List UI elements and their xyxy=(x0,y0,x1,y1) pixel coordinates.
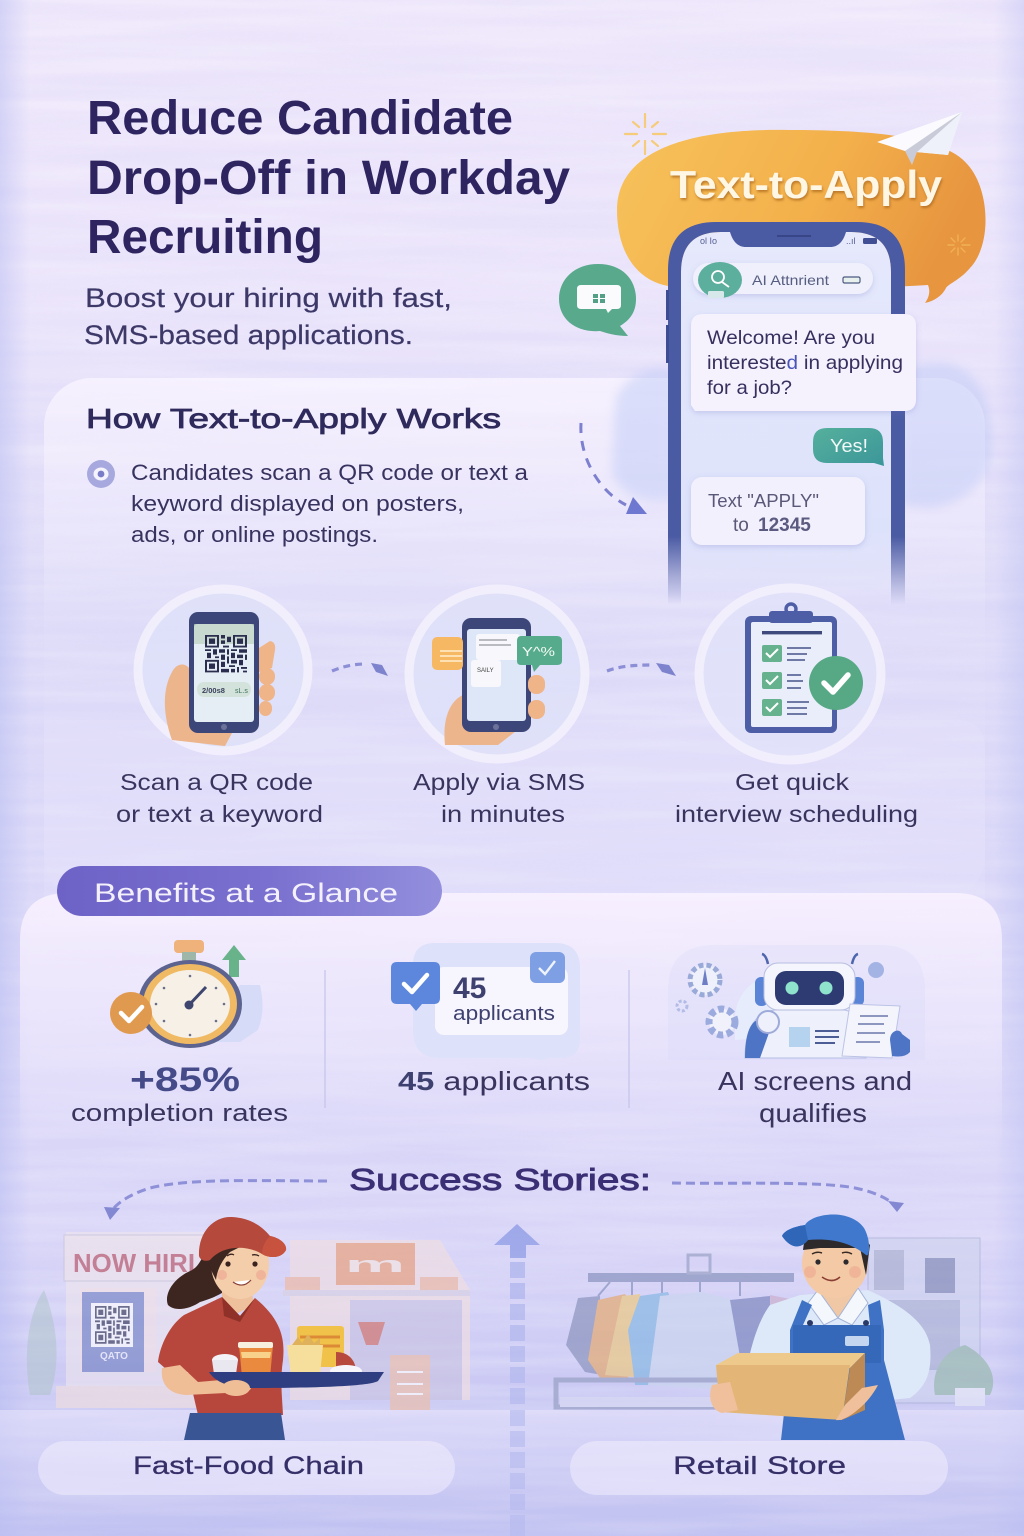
shelves right xyxy=(868,1238,980,1403)
icon: small sparkle on bubble xyxy=(948,235,970,255)
pill label: retail store xyxy=(570,1441,948,1495)
store right xyxy=(290,1240,470,1400)
benefit stat: AI screening: qualifies xyxy=(759,1098,867,1128)
checklist xyxy=(762,645,811,716)
big check xyxy=(809,656,863,710)
welcome message bubble: interested in applying xyxy=(707,352,903,374)
QR code xyxy=(205,635,247,672)
hands xyxy=(710,1382,738,1413)
subtitle: SMS-based applications. xyxy=(84,320,413,350)
QR poster xyxy=(91,1303,133,1347)
neck xyxy=(222,1280,254,1316)
panel: benefits xyxy=(20,893,1002,1155)
dashed arrow right xyxy=(672,1183,904,1212)
hand behind xyxy=(165,665,232,746)
hand xyxy=(444,695,520,745)
bubble heading: Text-to-Apply xyxy=(670,164,942,207)
dashed arrow to phone xyxy=(581,423,647,514)
hangers xyxy=(598,1282,740,1296)
phone mockup xyxy=(666,222,916,605)
shirt xyxy=(158,1297,283,1415)
reply bubble: Yes: Yes! xyxy=(830,436,868,456)
scene: retail store xyxy=(556,1238,993,1407)
lower step band xyxy=(44,720,985,900)
pill label: fast-food chain: Fast-Food Chain xyxy=(133,1452,364,1480)
hair xyxy=(167,1250,232,1309)
benefit dividers xyxy=(325,970,629,1108)
step 2: apply via SMS: SAILY xyxy=(477,668,494,674)
step circle xyxy=(699,588,881,760)
title xyxy=(87,92,570,264)
description text: Candidates scan a QR code or text a xyxy=(131,460,529,485)
face xyxy=(802,1228,868,1298)
arrow: step 1 to 2 xyxy=(332,663,388,676)
phone xyxy=(189,612,259,733)
arrow: step 2 to 3 xyxy=(607,663,676,676)
benefit: stopwatch xyxy=(110,940,263,1048)
welcome message bubble xyxy=(691,314,916,411)
subtitle xyxy=(84,283,452,350)
step captions: Get quick xyxy=(735,769,850,795)
benefit stat: completion rates: completion rates xyxy=(71,1100,288,1127)
step circle xyxy=(138,589,308,751)
robot head xyxy=(755,977,768,1006)
step captions: Scan a QR code xyxy=(120,769,313,795)
scene: fast-food storefront: m xyxy=(345,1252,405,1277)
keyword message bubble: to xyxy=(733,515,749,536)
benefit stat: AI screening: AI screens and xyxy=(718,1066,912,1096)
pill label: fast-food chain xyxy=(38,1441,455,1495)
description text xyxy=(131,460,529,547)
scene: fast-food storefront: QATO xyxy=(100,1351,128,1362)
keyword message bubble: 12345 xyxy=(758,515,811,536)
step 2: apply via SMS xyxy=(409,589,585,759)
benefit stat: applicants: 45 applicants xyxy=(398,1066,590,1096)
panel: how it works xyxy=(44,378,985,903)
cap xyxy=(782,1214,869,1255)
rack base xyxy=(556,1380,780,1407)
text-to-apply speech bubble xyxy=(617,112,986,303)
benefit: applicants card: applicants xyxy=(453,1003,555,1025)
fingers xyxy=(528,675,545,719)
overalls xyxy=(781,1300,905,1440)
robot body xyxy=(745,1010,867,1058)
keyword message bubble: Text "APPLY" xyxy=(708,491,819,511)
step captions: Apply via SMS xyxy=(413,769,585,795)
description text: keyword displayed on posters, xyxy=(131,491,464,516)
step 1: scan QR: 2/00s8 xyxy=(202,686,225,695)
character: fast-food worker xyxy=(158,1217,384,1440)
central divider arrow xyxy=(494,1224,540,1536)
cap xyxy=(199,1217,286,1261)
face xyxy=(211,1229,269,1299)
box xyxy=(716,1353,865,1368)
step 1: scan QR: sL.s xyxy=(235,688,248,695)
phone status bar: ol Io xyxy=(700,236,717,246)
benefit stat: completion rates: +85% xyxy=(130,1061,240,1099)
subtitle: Boost your hiring with fast, xyxy=(85,283,452,313)
title: Recruiting xyxy=(87,211,323,264)
now hiring sign: NOW HIRI xyxy=(73,1248,195,1278)
clipboard xyxy=(745,616,837,733)
title: Drop-Off in Workday xyxy=(87,152,570,205)
description text: ads, or online postings. xyxy=(131,522,378,547)
step 2: apply via SMS: Y^% xyxy=(522,644,556,659)
step circle xyxy=(409,589,585,759)
shirt xyxy=(745,1290,930,1400)
clothes xyxy=(566,1296,602,1375)
fingers xyxy=(259,641,275,716)
hand on tray xyxy=(222,1380,250,1396)
phone status bar xyxy=(700,236,877,246)
step 3: interview scheduling xyxy=(699,588,881,760)
rack xyxy=(588,1273,794,1282)
icon: paper plane xyxy=(877,112,962,165)
pill label: retail store: Retail Store xyxy=(673,1452,846,1480)
benefit stat: completion rates xyxy=(71,1061,288,1127)
ground band xyxy=(0,1410,1024,1536)
character: retail worker xyxy=(710,1214,930,1440)
step captions: or text a keyword xyxy=(116,801,323,827)
icon: green chat bubble xyxy=(559,264,636,336)
tray with food xyxy=(209,1326,384,1388)
panel heading: how it works: How Text-to-Apply Works xyxy=(86,403,501,434)
neck & collar xyxy=(818,1278,860,1318)
icon: bullet xyxy=(87,460,115,488)
plant xyxy=(934,1345,993,1395)
title: Reduce Candidate xyxy=(87,92,513,145)
green SMS badge xyxy=(517,636,562,672)
paper xyxy=(842,1004,900,1058)
benefit: applicants card: 45 xyxy=(453,972,486,1005)
step captions xyxy=(116,769,918,827)
gears xyxy=(677,962,884,1035)
step captions: interview scheduling xyxy=(675,801,918,827)
step 1: scan QR xyxy=(138,589,308,751)
search pill: AI Attnrient xyxy=(752,272,829,288)
step captions: in minutes xyxy=(441,801,565,827)
benefit: applicants card xyxy=(391,943,580,1060)
dashed arrow left xyxy=(104,1181,327,1220)
success stories heading: Success Stories: xyxy=(349,1162,651,1197)
leaves xyxy=(27,1290,57,1395)
scene: fast-food storefront xyxy=(27,1232,470,1410)
jeans xyxy=(184,1413,285,1440)
welcome message bubble: for a job? xyxy=(707,377,792,399)
phone xyxy=(462,618,531,732)
keyword message bubble xyxy=(691,477,865,545)
benefits heading pill: Benefits at a Glance xyxy=(94,878,398,908)
background watercolor blobs behind phone xyxy=(612,362,993,508)
search pill xyxy=(693,262,873,298)
reply bubble: Yes xyxy=(813,428,884,466)
benefit stat: AI screening xyxy=(718,1066,912,1128)
icon: sparkle xyxy=(625,114,666,154)
store left xyxy=(66,1232,216,1397)
welcome message bubble: Welcome! Are you xyxy=(707,327,875,349)
phone status bar: ..ıl xyxy=(846,236,856,246)
benefits heading pill xyxy=(57,866,442,916)
orange card xyxy=(432,637,463,670)
benefit: AI robot xyxy=(668,945,925,1060)
arm xyxy=(162,1365,252,1395)
